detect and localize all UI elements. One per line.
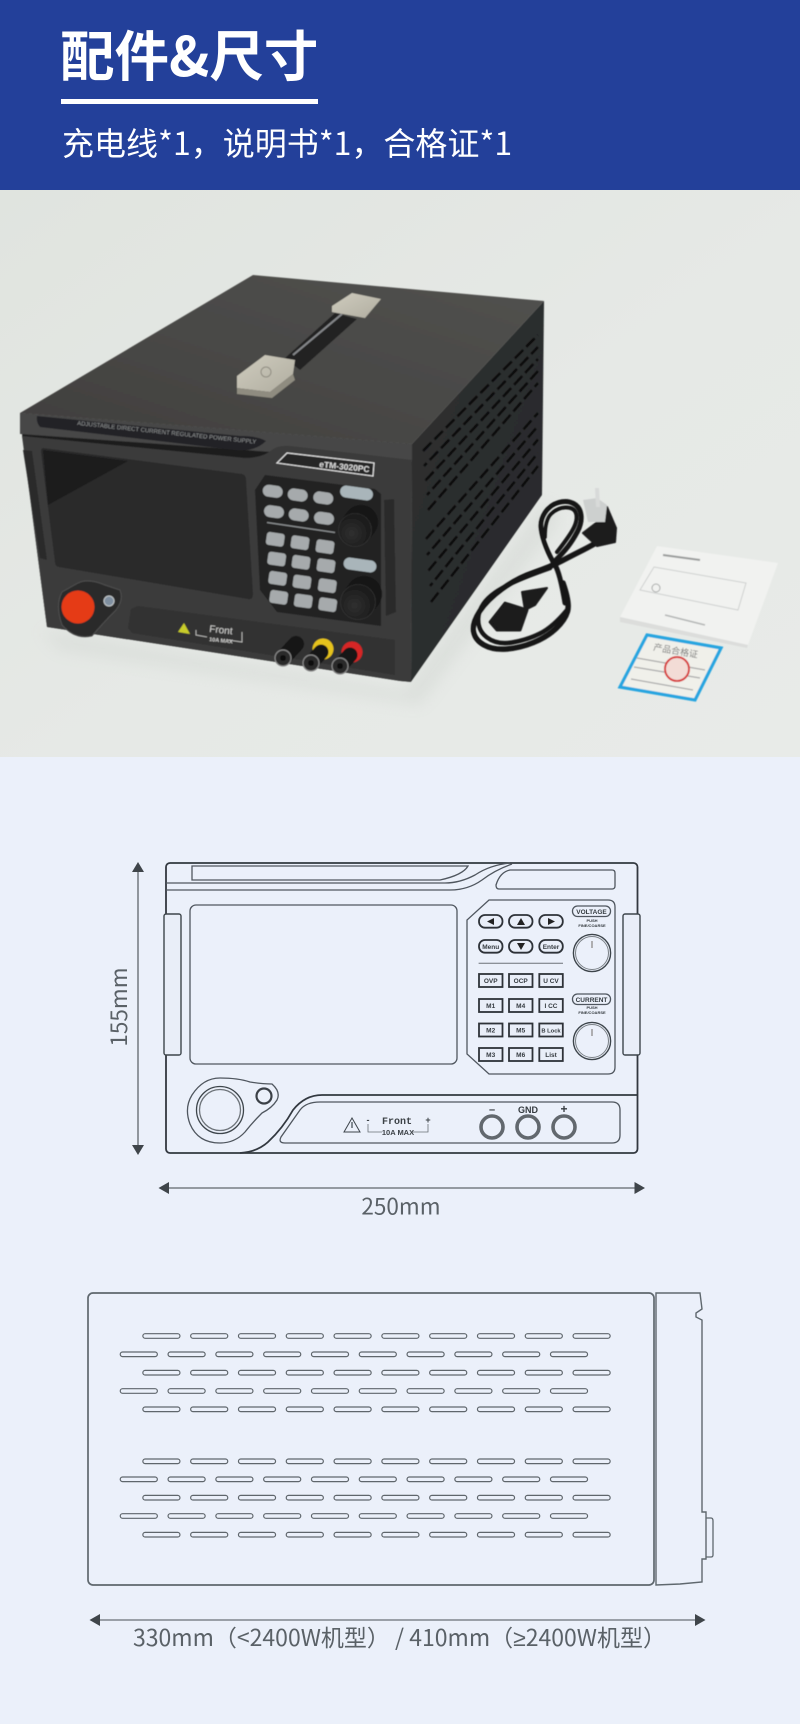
emergency stop housing: [187, 1078, 278, 1143]
front view outline: [166, 863, 638, 1153]
voltage control: [572, 906, 611, 972]
keypad arrow keys: Enter: [543, 944, 560, 951]
current control: FINE/COARSE: [578, 1010, 606, 1015]
keypad function keys: M6: [516, 1052, 526, 1059]
title underline: [61, 99, 318, 104]
front right handle: [384, 499, 396, 616]
keypad buttons: [262, 484, 338, 612]
front label: -: [366, 1115, 370, 1125]
width label: 250mm: [361, 1190, 441, 1222]
keypad arrow keys: [479, 915, 563, 953]
keypad function keys: M5: [516, 1028, 526, 1034]
handle: [237, 293, 381, 398]
front base: [20, 413, 412, 682]
model label: [277, 453, 374, 476]
keypad function keys: List: [545, 1052, 558, 1059]
width dimension arrow: [158, 1182, 645, 1194]
front view drawing: [164, 863, 640, 1153]
photo: power cord: [473, 488, 616, 649]
keypad function keys: M4: [516, 1003, 526, 1010]
front view left handle: [164, 914, 181, 1055]
emergency stop button: [58, 581, 121, 637]
keypad panel: [255, 475, 381, 626]
product photo panel: [0, 190, 800, 757]
front face: [22, 436, 412, 682]
front label text: Front: [209, 624, 233, 637]
depth label: 330mm（<2400W机型） / 410mm（≥2400W机型）: [133, 1619, 666, 1653]
model label: eTM-3020PC: [319, 459, 370, 474]
keypad function keys: OCP: [514, 978, 528, 985]
side rear section: [656, 1293, 706, 1585]
voltage pill: [339, 485, 374, 501]
front view right handle: [623, 914, 640, 1055]
photo: floor shadow: [40, 500, 560, 705]
height dimension arrow: [132, 862, 144, 1155]
side vents: [423, 335, 538, 602]
current knob: [340, 576, 382, 620]
output panel outline: [280, 1102, 620, 1143]
voltage knob: [338, 505, 378, 546]
keypad function keys: M3: [486, 1052, 496, 1059]
front label text: 10A MAX: [209, 637, 233, 645]
keypad function keys: M2: [486, 1028, 496, 1034]
display screen: [41, 448, 253, 599]
keypad function keys: U CV: [543, 978, 559, 985]
lower panel contour: [240, 1095, 637, 1153]
keypad function keys: OVP: [484, 978, 498, 985]
side panel outline: [88, 1293, 654, 1585]
front label: +: [425, 1115, 431, 1125]
output terminals: GND: [518, 1105, 538, 1115]
keypad function keys: B Lock: [541, 1028, 561, 1034]
positive terminal: [332, 642, 362, 674]
brand strip: [37, 416, 266, 450]
rear connector bump: [706, 1518, 713, 1557]
front left handle: [23, 450, 47, 560]
voltage control: VOLTAGE: [576, 909, 607, 916]
output terminals: –: [489, 1104, 495, 1116]
photo: power supply unit: [20, 275, 544, 682]
current control: [572, 994, 611, 1060]
keypad function keys: I CC: [544, 1003, 558, 1010]
unit top face: [20, 275, 544, 444]
side vents: [123, 1336, 608, 1535]
title: 配件&尺寸: [60, 13, 318, 92]
unit right face: [411, 301, 544, 682]
output terminals: [481, 1102, 575, 1138]
photo: qualification card: 产品合格证: [653, 641, 699, 660]
front view screen: [190, 905, 457, 1064]
side view drawing: [88, 1293, 713, 1585]
warning triangle: [178, 623, 190, 634]
brand strip text: ADJUSTABLE DIRECT CURRENT REGULATED POWER SUPPLY: [77, 421, 257, 446]
keypad outline: [467, 900, 615, 1074]
front label: Front: [382, 1117, 412, 1128]
voltage control: PUSH: [586, 918, 598, 923]
header banner: [0, 0, 800, 190]
output terminals: +: [560, 1102, 568, 1116]
front top band: [20, 413, 412, 462]
voltage control: FINE/COARSE: [578, 923, 606, 928]
keypad function keys: M1: [486, 1003, 496, 1010]
negative terminal: [275, 644, 296, 666]
output panel: [128, 606, 395, 675]
photo: user manual: [620, 546, 778, 648]
warning icon: [344, 1118, 360, 1132]
current control: CURRENT: [576, 997, 607, 1004]
photo: qualification card: [620, 635, 721, 700]
current control: PUSH: [586, 1005, 598, 1010]
height label: 155mm: [102, 967, 134, 1047]
front label text: [196, 624, 242, 645]
front label: [366, 1115, 431, 1137]
front label: 10A MAX: [382, 1128, 414, 1137]
current pill: [343, 557, 377, 573]
ground terminal: [303, 638, 334, 671]
keypad function keys: [479, 974, 563, 1061]
depth dimension arrow: [90, 1614, 706, 1626]
accessories list: 充电线*1，说明书*1，合格证*1: [62, 119, 512, 165]
screen reflection: [43, 450, 128, 505]
keypad arrow keys: Menu: [482, 944, 499, 951]
